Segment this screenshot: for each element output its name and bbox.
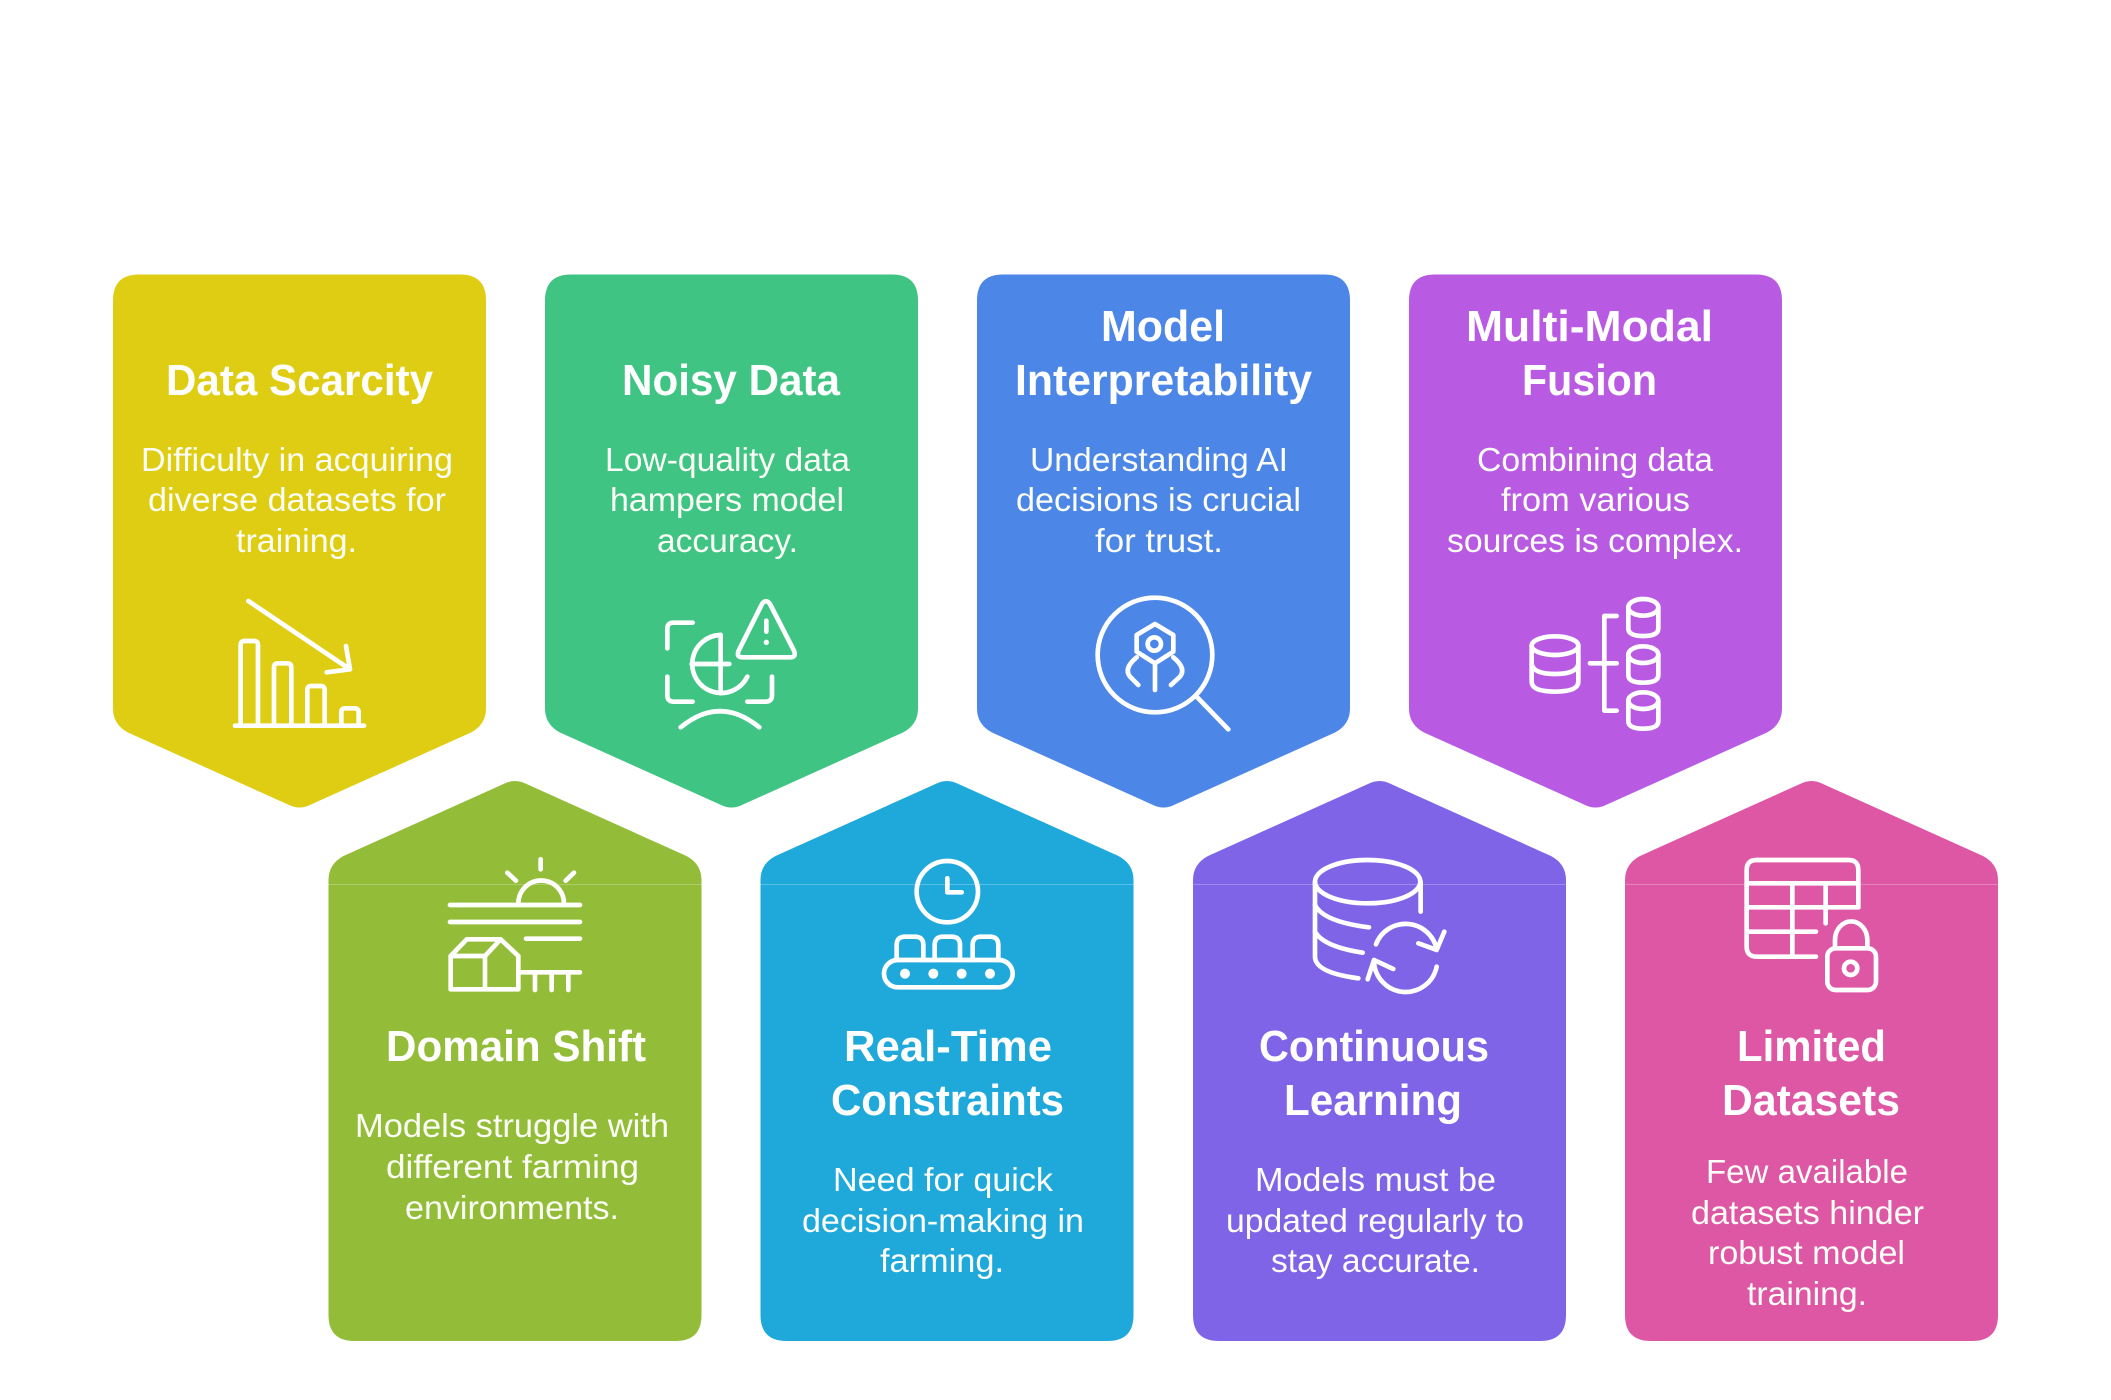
panel: Limited Datasets bbox=[1625, 781, 1998, 1341]
heading: Real-Time Constraints bbox=[831, 1022, 1064, 1125]
text block: Domain Shift description bbox=[355, 1107, 669, 1226]
text block: Limited Datasets description: datasets hinder bbox=[1691, 1194, 1924, 1231]
text block: Data Scarcity description: Difficulty in acquiring bbox=[141, 441, 453, 478]
text block: Domain Shift description: environments. bbox=[405, 1189, 619, 1226]
card shape: lime bbox=[328, 781, 702, 1341]
text block: Noisy Data description: accuracy. bbox=[657, 522, 798, 559]
text block: Domain Shift description: different farming bbox=[386, 1148, 639, 1185]
text block: Limited Datasets description bbox=[1691, 1153, 1924, 1312]
icon: clock over conveyor bbox=[884, 861, 1013, 987]
panel: Multi-Modal Fusion bbox=[1409, 274, 1782, 808]
heading: Model Interpretability bbox=[1015, 302, 1313, 405]
text block: Model Interpretability description: decisions is crucial bbox=[1016, 481, 1301, 518]
text block: Model Interpretability description: for trust. bbox=[1095, 522, 1223, 559]
heading: Multi-Modal Fusion bbox=[1466, 302, 1713, 405]
text block: Data Scarcity description: diverse datasets for bbox=[148, 481, 446, 518]
heading: Continuous Learning: Learning bbox=[1284, 1076, 1462, 1125]
text block: Noisy Data description: Low-quality data bbox=[605, 441, 851, 478]
heading: Real-Time Constraints: Constraints bbox=[831, 1076, 1064, 1125]
icon: magnifier over robot claw bbox=[1098, 598, 1228, 729]
icon: database with refresh arrows bbox=[1315, 860, 1444, 992]
heading: Data Scarcity: Data Scarcity bbox=[166, 356, 434, 405]
text block: Continuous Learning description: stay accurate. bbox=[1271, 1242, 1480, 1279]
text block: Multi-Modal Fusion description: Combining data bbox=[1477, 441, 1714, 478]
icon: declining bar chart bbox=[235, 601, 364, 726]
text block: Data Scarcity description: training. bbox=[236, 522, 357, 559]
text block: Real-Time Constraints description bbox=[802, 1161, 1084, 1279]
card shape: blue bbox=[977, 274, 1350, 808]
card shape: purple bbox=[1409, 274, 1782, 808]
heading: Limited Datasets: Limited bbox=[1737, 1022, 1886, 1071]
text block: Limited Datasets description: training. bbox=[1747, 1275, 1867, 1312]
panel: Real-Time Constraints bbox=[760, 781, 1134, 1341]
card shape: violet bbox=[1193, 781, 1566, 1341]
panel: Data Scarcity bbox=[113, 274, 486, 808]
text block: Noisy Data description bbox=[605, 441, 851, 559]
heading: Limited Datasets: Datasets bbox=[1722, 1076, 1900, 1125]
text block: Multi-Modal Fusion description: sources is complex. bbox=[1447, 522, 1743, 559]
icon: noisy scan with warning bbox=[667, 601, 795, 727]
heading: Continuous Learning: Continuous bbox=[1259, 1022, 1489, 1071]
text block: Real-Time Constraints description: Need for quick bbox=[833, 1161, 1054, 1198]
icon: databases merging bbox=[1532, 599, 1658, 729]
text block: Continuous Learning description bbox=[1226, 1161, 1524, 1279]
text block: Domain Shift description: Models struggle with bbox=[355, 1107, 669, 1144]
heading: Model Interpretability: Model bbox=[1101, 302, 1225, 351]
text block: Data Scarcity description bbox=[141, 441, 453, 559]
heading: Continuous Learning bbox=[1259, 1022, 1489, 1125]
text block: Continuous Learning description: Models must be bbox=[1255, 1161, 1496, 1198]
card shape: cyan bbox=[760, 781, 1134, 1341]
heading: Limited Datasets bbox=[1722, 1022, 1900, 1125]
panel: Continuous Learning bbox=[1193, 781, 1566, 1341]
panel: Domain Shift bbox=[328, 781, 702, 1341]
text block: Real-Time Constraints description: decision-making in bbox=[802, 1202, 1084, 1239]
card shape: green bbox=[545, 274, 918, 808]
heading: Multi-Modal Fusion: Fusion bbox=[1522, 356, 1657, 405]
heading: Multi-Modal Fusion: Multi-Modal bbox=[1466, 302, 1713, 351]
text block: Limited Datasets description: Few available bbox=[1706, 1153, 1908, 1190]
icon: locked data table bbox=[1747, 860, 1876, 990]
heading: Real-Time Constraints: Real-Time bbox=[844, 1022, 1052, 1071]
heading: Domain Shift: Domain Shift bbox=[386, 1022, 646, 1071]
heading: Model Interpretability: Interpretability bbox=[1015, 356, 1313, 405]
card shape: pink bbox=[1625, 781, 1998, 1341]
text block: Multi-Modal Fusion description bbox=[1447, 441, 1743, 559]
text block: Multi-Modal Fusion description: from various bbox=[1501, 481, 1690, 518]
text block: Model Interpretability description bbox=[1016, 441, 1301, 559]
heading: Noisy Data: Noisy Data bbox=[622, 356, 840, 405]
icon: farm and sunrise bbox=[450, 859, 580, 990]
panel: Noisy Data bbox=[545, 274, 918, 808]
card shape: yellow bbox=[113, 274, 486, 808]
text block: Model Interpretability description: Understanding AI bbox=[1030, 441, 1288, 478]
text block: Real-Time Constraints description: farming. bbox=[880, 1242, 1004, 1279]
text block: Continuous Learning description: updated regularly to bbox=[1226, 1202, 1524, 1239]
text block: Noisy Data description: hampers model bbox=[610, 481, 844, 518]
panel: Model Interpretability bbox=[977, 274, 1350, 808]
text block: Limited Datasets description: robust model bbox=[1708, 1234, 1905, 1271]
